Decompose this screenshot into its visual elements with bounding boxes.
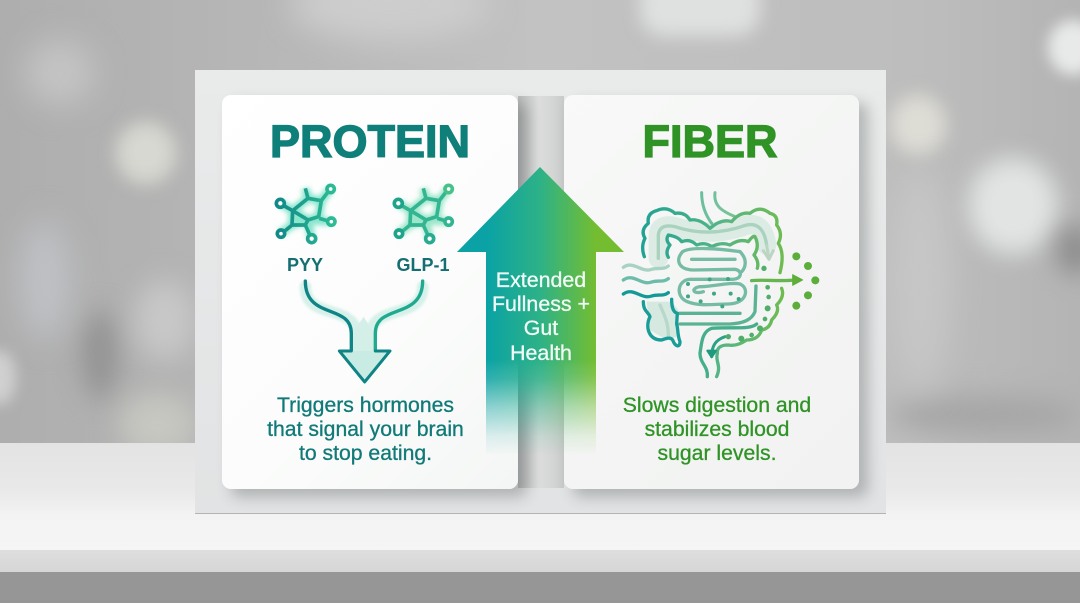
blurred background [0,0,1080,443]
icons and arrows in protein panel [276,185,452,382]
arrow: hormones converging downward [305,281,423,382]
small intestine [679,249,746,305]
colon fill [658,225,767,258]
text: fiber description: sugar levels. [658,442,776,465]
panel: fiber [564,95,859,489]
shelf shadow below [0,572,1080,603]
gap shading between cards [518,96,564,488]
dots [686,252,819,342]
text: fiber description [623,394,811,465]
text: protein description [267,394,464,465]
shelf front edge [0,550,1080,572]
icon: digestive tract [623,193,819,377]
cecum and lower colon [643,299,680,346]
text: fiber description: stabilizes blood [645,418,789,441]
text: arrow label [492,268,590,365]
icon: GLP-1 molecule [394,185,452,243]
label: PYY: PYY [287,255,323,275]
heading: protein: PROTEIN [270,116,470,167]
arrow: upward gradient [457,167,624,460]
display board [195,70,886,514]
text: protein description: Triggers hormones [277,394,454,417]
text: arrow label: Fullness + [492,292,590,316]
text: fiber description: Slows digestion and [623,394,811,417]
icon: PYY molecule [276,185,335,243]
text: protein description: to stop eating. [299,442,432,465]
text: arrow label: Health [510,341,572,365]
text: protein description: that signal your brain [267,418,464,441]
text: arrow label: Gut [524,316,558,340]
text: arrow label: Extended [496,268,586,292]
label: GLP-1: GLP-1 [396,255,450,275]
shelf surface [0,443,1080,550]
wavy lines [623,265,668,270]
heading: fiber: FIBER [642,116,778,167]
panel: protein [222,95,518,489]
descending colon [717,288,783,377]
absorption arrow [752,275,795,286]
